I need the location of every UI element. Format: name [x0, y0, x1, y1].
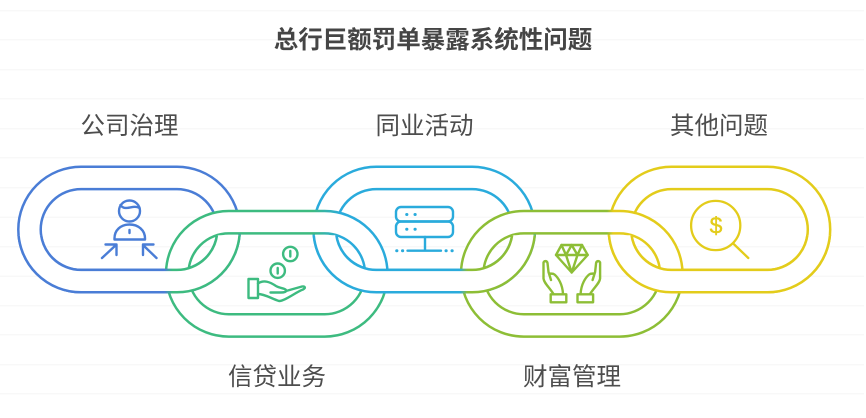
icon: hand with coins: [248, 247, 305, 301]
chain link: yellow: [609, 167, 830, 292]
label: corporate governance: 公司治理: [80, 112, 178, 140]
cyan link lower band over lime and green: [312, 235, 536, 294]
chain link: lime: [461, 211, 682, 337]
icon: diamond in hands: [544, 245, 600, 302]
title: 总行巨额罚单暴露系统性问题: [274, 26, 592, 54]
chain link: green: [166, 211, 388, 337]
label: other issues: 其他问题: [670, 112, 768, 140]
label: wealth management: 财富管理: [523, 363, 621, 391]
icon: server: [396, 207, 453, 251]
chain link: cyan: [314, 167, 535, 292]
chain link: blue: [18, 167, 240, 292]
icon: magnifier with dollar sign: $: [710, 212, 723, 238]
icon: magnifier with dollar sign: [691, 201, 748, 258]
blue link lower band over green: [17, 235, 241, 294]
label: interbank activity: 同业活动: [376, 112, 474, 140]
yellow link lower band over lime: [608, 235, 832, 294]
icon: person with arrows: [102, 200, 156, 258]
label: credit business: 信贷业务: [228, 363, 326, 391]
